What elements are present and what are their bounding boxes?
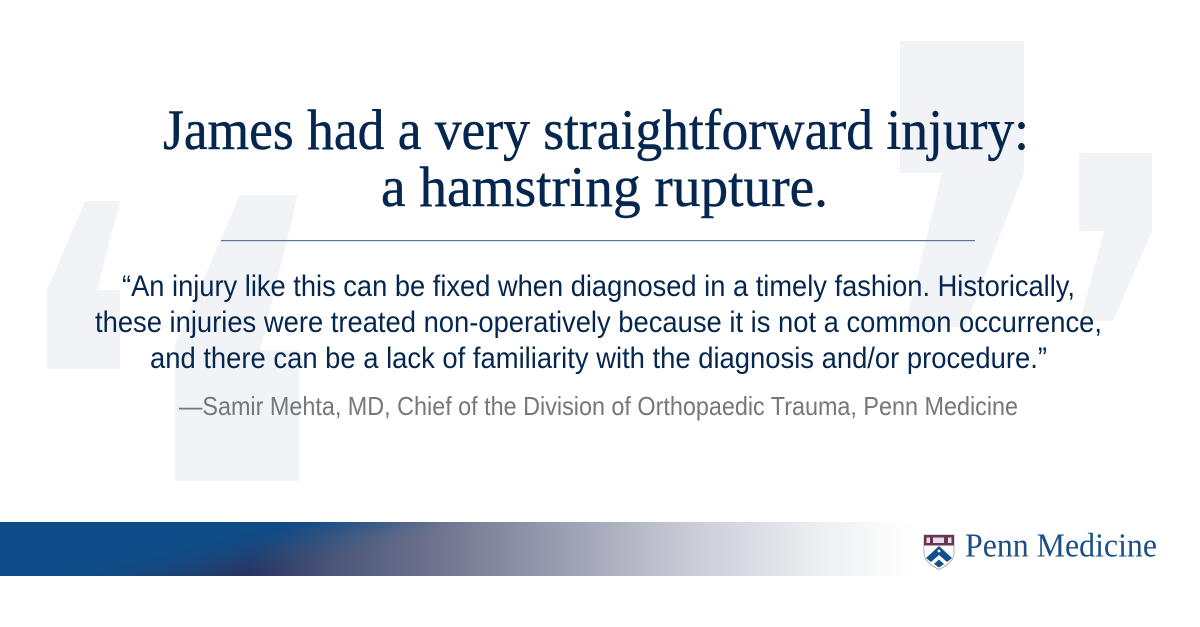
- quote text: [95, 270, 1102, 375]
- logo: Penn Medicine: [924, 528, 1157, 570]
- divider rule: [221, 240, 975, 241]
- headline: James had a very straightforward injury:: [163, 99, 1029, 162]
- decorative closing quotation mark: [900, 41, 1152, 327]
- gradient band: [0, 522, 915, 576]
- quote text: “An injury like this can be fixed when diagnosed in a timely fashion. Historically,: [122, 270, 1075, 303]
- decorative opening quotation mark: [47, 195, 299, 481]
- quote text: these injuries were treated non-operatively because it is not a common occurrence,: [95, 306, 1102, 339]
- icon: Penn shield: [924, 535, 954, 570]
- attribution: —Samir Mehta, MD, Chief of the Division of Orthopaedic Trauma, Penn Medicine: [179, 391, 1018, 421]
- headline: [163, 99, 1029, 219]
- headline: a hamstring rupture.: [381, 156, 828, 219]
- quote text: and there can be a lack of familiarity with the diagnosis and/or procedure.”: [150, 342, 1047, 375]
- logo wordmark: Penn Medicine: [965, 528, 1157, 564]
